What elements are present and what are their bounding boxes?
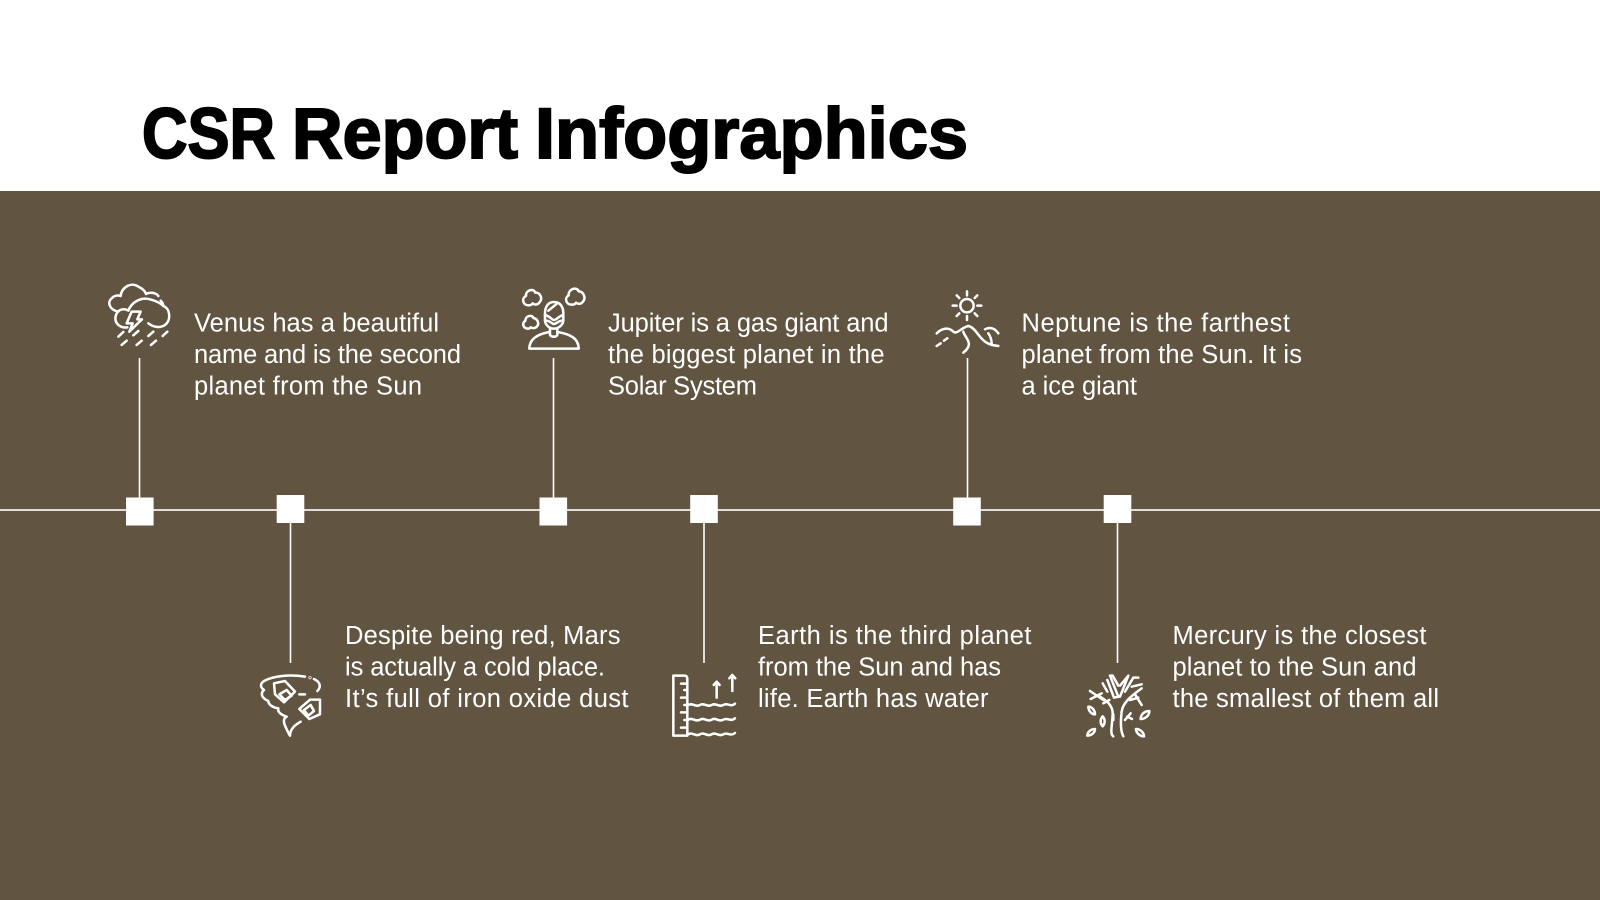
text: Earth: Earth is the third planet (758, 622, 1032, 650)
text: Mars: Despite being red, Mars (345, 622, 620, 650)
milestone: Earth (673, 495, 1032, 736)
text: Venus (194, 310, 461, 400)
milestone: Jupiter (523, 289, 888, 526)
text: Mercury: the smallest of them all (1172, 685, 1439, 713)
icon: sun over dunes (937, 291, 998, 353)
text: Venus: Venus has a beautiful (194, 310, 439, 338)
text: Neptune (1022, 310, 1302, 400)
text: Mercury (1172, 622, 1439, 713)
text: Neptune: a ice giant (1022, 372, 1137, 400)
text: Earth: life. Earth has water (758, 685, 989, 713)
text: Mars (345, 622, 628, 713)
icon: storm cloud (109, 285, 169, 345)
text: Mars: is actually a cold place. (345, 654, 605, 682)
text: Jupiter (608, 310, 888, 400)
icon: water level ruler (673, 675, 735, 736)
milestone: Venus (109, 285, 461, 526)
title (142, 95, 968, 174)
text: Neptune: planet from the Sun. It is (1022, 341, 1302, 369)
text: Earth (758, 622, 1032, 713)
stem and marker (1104, 495, 1131, 663)
title: Report (292, 95, 518, 174)
text: Mercury: planet to the Sun and (1172, 654, 1416, 682)
milestone: Neptune (937, 291, 1302, 526)
stem and marker (126, 358, 154, 526)
text: Jupiter: the biggest planet in the (608, 341, 884, 369)
timeline axis (0, 509, 1600, 511)
title: CSR (142, 95, 275, 174)
text: Mars: It’s full of iron oxide dust (345, 685, 628, 713)
text: Jupiter: Solar System (608, 372, 757, 400)
text: Neptune: Neptune is the farthest (1022, 310, 1290, 338)
icon: tree losing leaves (1087, 676, 1149, 736)
stem and marker (277, 495, 304, 663)
title: Infographics (535, 95, 968, 174)
milestone: Mars (261, 495, 628, 736)
text: Earth: from the Sun and has (758, 654, 1001, 682)
text: Venus: name and is the second (194, 341, 461, 369)
stem and marker (953, 358, 981, 526)
icon: tornado with houses (261, 676, 320, 736)
text: Venus: planet from the Sun (194, 372, 422, 400)
stem and marker (690, 495, 718, 663)
icon: person in mask with pollution clouds (523, 289, 584, 349)
milestone: Mercury (1087, 495, 1439, 736)
stem and marker (540, 358, 567, 526)
text: Mercury: Mercury is the closest (1172, 622, 1426, 650)
text: Jupiter: Jupiter is a gas giant and (608, 310, 888, 338)
